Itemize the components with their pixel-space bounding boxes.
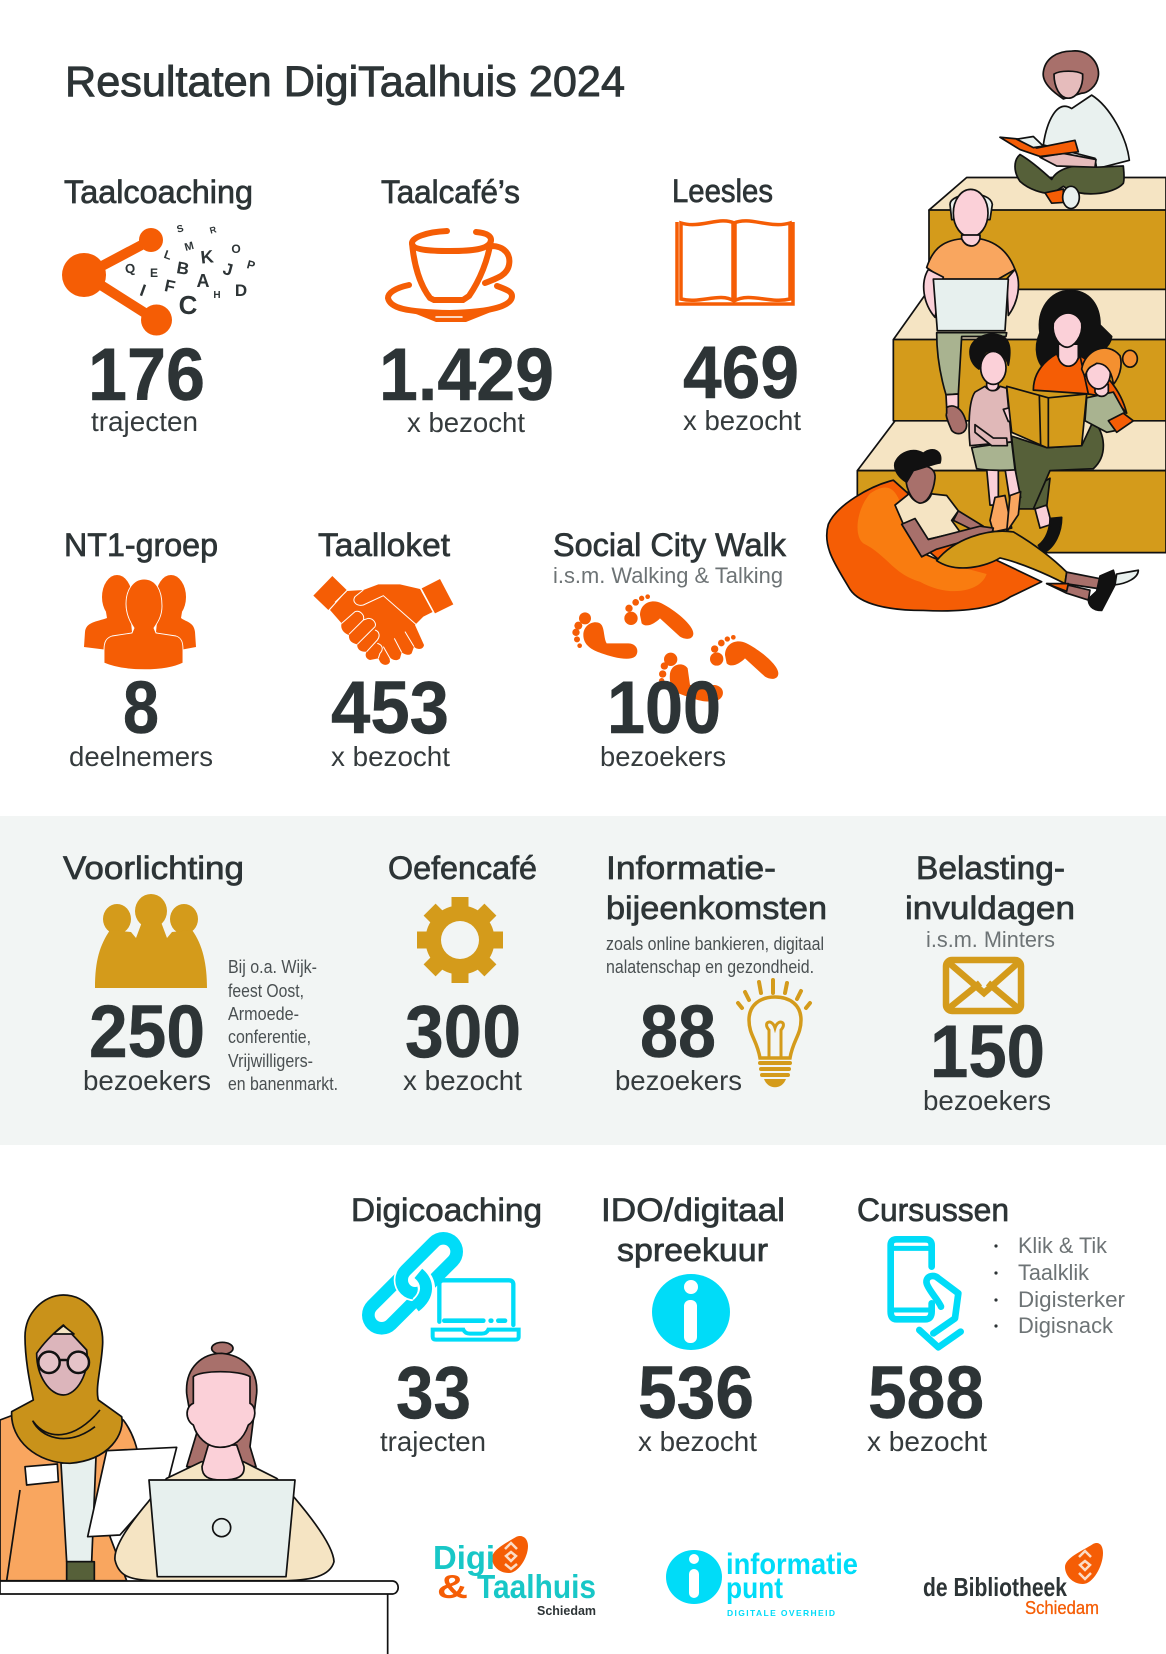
logo: Digi & Taalhuis Schiedam	[433, 1536, 596, 1618]
icon: gear	[417, 897, 503, 983]
side note: en banenmarkt.	[228, 1074, 338, 1094]
heading: Social City Walk	[553, 527, 787, 563]
heading: NT1-groep	[64, 527, 218, 563]
logo text: Digi	[433, 1539, 495, 1576]
number: 100	[607, 666, 721, 749]
course list	[994, 1233, 1125, 1338]
number: 88	[640, 990, 716, 1073]
label: bezoekers	[615, 1065, 742, 1096]
label: deelnemers	[69, 741, 213, 772]
woman with hijab	[0, 1295, 177, 1581]
panel: grey band	[0, 816, 1166, 1145]
icon: footprints	[572, 594, 778, 702]
logo text: informatie	[726, 1548, 858, 1581]
logo ampersand: &	[437, 1568, 468, 1605]
number: 300	[405, 990, 521, 1073]
icon: network with letters: S	[176, 223, 185, 236]
icon: network with letters: H	[213, 290, 221, 301]
stairs	[857, 178, 1166, 553]
icon: network with letters: E	[150, 266, 158, 280]
label: bezoekers	[83, 1065, 211, 1096]
woman reading on top step	[1000, 51, 1129, 209]
logo: de Bibliotheek Schiedam	[923, 1543, 1103, 1618]
label: x bezocht	[638, 1426, 757, 1457]
heading: Digicoaching	[351, 1192, 542, 1228]
number: 8	[123, 666, 159, 749]
number: 1.429	[379, 333, 554, 416]
open book and little girl	[1007, 348, 1137, 448]
label: x bezocht	[683, 405, 801, 436]
label: x bezocht	[867, 1426, 987, 1457]
course list: Digisterker	[1018, 1287, 1125, 1312]
logo place: Schiedam	[1025, 1598, 1099, 1618]
icon: network with letters: M	[183, 240, 195, 254]
icon: coffee cup	[388, 231, 512, 322]
number: 250	[89, 990, 205, 1073]
icon: network with letters: D	[235, 281, 247, 300]
illustration: people reading on stairs	[827, 51, 1166, 611]
number: 588	[868, 1351, 984, 1434]
icon: network with letters: B	[175, 258, 191, 279]
panel: Digicoaching	[351, 1192, 542, 1457]
logo text: de Bibliotheek	[923, 1572, 1067, 1602]
icon: three people	[84, 575, 196, 670]
icon: network with letters: Q	[124, 260, 136, 277]
side note: feest Oost,	[228, 981, 304, 1001]
heading: Oefencafé	[388, 850, 537, 886]
logo mark	[666, 1550, 722, 1604]
subheading: i.s.m. Minters	[926, 927, 1055, 952]
panel: Cursussen	[857, 1192, 1125, 1457]
panel: Voorlichting	[63, 850, 338, 1096]
panel: Belastinginvuldagen	[905, 850, 1075, 1116]
label: trajecten	[91, 406, 198, 437]
icon: network with letters: K	[200, 246, 215, 268]
heading: Belasting-	[916, 850, 1065, 886]
icon: network with letters: P	[245, 257, 257, 273]
side note: Bij o.a. Wijk-	[228, 957, 317, 977]
heading line 2: invuldagen	[905, 890, 1075, 926]
heading: Informatie-	[606, 850, 776, 886]
mother reading	[1012, 291, 1112, 553]
heading line 2: bijeenkomsten	[606, 890, 827, 926]
number: 150	[930, 1010, 1045, 1093]
heading line 2: spreekuur	[617, 1232, 768, 1268]
heading: Taalloket	[318, 527, 450, 563]
heading: Taalcoaching	[64, 174, 253, 210]
icon: group of people	[95, 894, 207, 988]
number: 469	[683, 331, 799, 414]
icon: hand holding phone	[891, 1239, 961, 1347]
logo mark	[1065, 1543, 1103, 1584]
number: 453	[331, 666, 449, 749]
panel: Social City Walk	[553, 527, 787, 772]
logo tagline: DIGITALE OVERHEID	[727, 1608, 835, 1618]
icon: network with letters: A	[196, 271, 210, 291]
side note: Armoede-	[228, 1004, 299, 1024]
heading: Leesles	[672, 173, 773, 209]
panel: Taalloket	[313, 527, 453, 772]
note line 2: nalatenschap en gezondheid.	[606, 957, 814, 977]
boy reading	[969, 334, 1021, 532]
panel: Leesles	[672, 173, 801, 436]
man on orange bean bag	[827, 450, 1138, 611]
icon: network with letters: L	[162, 247, 174, 263]
panel: Taalcoaching	[62, 174, 257, 437]
heading: Taalcafé’s	[381, 174, 520, 210]
icon: network with letters: O	[231, 242, 241, 256]
note: zoals online bankieren, digitaal	[606, 934, 824, 954]
label: bezoekers	[600, 741, 726, 772]
label: bezoekers	[923, 1085, 1051, 1116]
logo place: Schiedam	[537, 1603, 596, 1618]
icon: network with letters: J	[221, 259, 235, 280]
number: 176	[88, 333, 205, 416]
label: x bezocht	[407, 407, 525, 438]
course list: Taalklik	[1018, 1260, 1090, 1285]
heading: Voorlichting	[63, 850, 244, 886]
label: trajecten	[380, 1426, 486, 1457]
logo text line 2: Taalhuis	[477, 1568, 596, 1605]
label: x bezocht	[331, 741, 450, 772]
side note	[228, 957, 338, 1094]
icon: open book	[677, 221, 793, 304]
panel: Taalcafé's	[379, 174, 554, 438]
subheading: i.s.m. Walking & Talking	[553, 563, 783, 588]
heading: Cursussen	[857, 1192, 1009, 1228]
icon: network with letters: C	[179, 290, 198, 320]
panel: NT1-groep	[64, 527, 218, 772]
panel: IDO/digitaal spreekuur	[601, 1192, 785, 1457]
side note: Vrijwilligers-	[228, 1051, 313, 1071]
logo: informatiepunt	[666, 1548, 858, 1618]
course list: Klik & Tik	[1018, 1233, 1108, 1258]
older man with laptop	[924, 189, 1018, 434]
course list: Digisnack	[1018, 1313, 1114, 1338]
icon: network with letters: R	[209, 224, 218, 236]
number: 33	[396, 1351, 471, 1434]
label: x bezocht	[403, 1065, 522, 1096]
icon: chain link and laptop	[382, 1252, 519, 1340]
icon: network with letters: F	[163, 276, 177, 297]
icon: handshake	[313, 576, 453, 665]
icon: information	[652, 1274, 730, 1350]
desk	[0, 1581, 398, 1654]
logo mark	[492, 1536, 528, 1573]
icon: light bulb	[738, 980, 810, 1087]
panel: Informatiebijeenkomsten	[606, 850, 827, 1096]
icon: network with letters: I	[137, 281, 148, 300]
logo text line 2: punt	[726, 1572, 783, 1605]
title: Resultaten DigiTaalhuis 2024	[65, 58, 625, 106]
panel: Oefencafé	[388, 850, 537, 1096]
number: 536	[638, 1351, 754, 1434]
illustration: two women at a desk with a laptop	[0, 1295, 398, 1654]
icon: network with letters	[62, 223, 257, 336]
heading: IDO/digitaal	[601, 1192, 785, 1228]
icon: envelope	[946, 960, 1021, 1011]
woman with laptop	[115, 1342, 334, 1581]
side note: conferentie,	[228, 1027, 311, 1047]
